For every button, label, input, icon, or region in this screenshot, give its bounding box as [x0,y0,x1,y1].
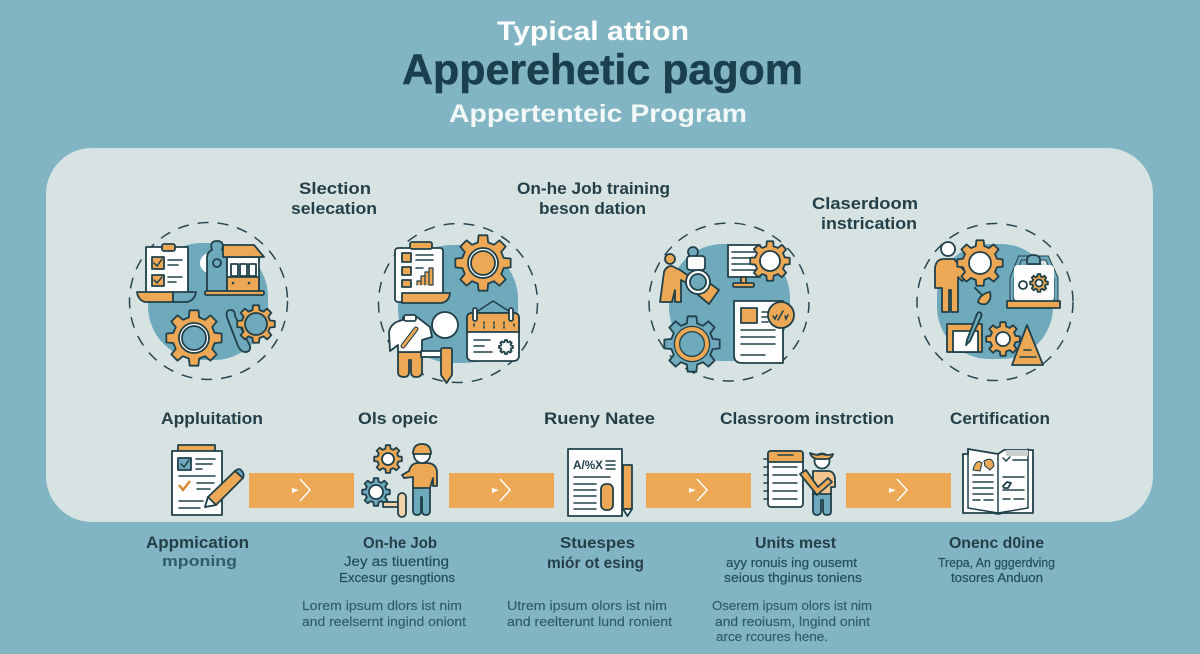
caption 2: and reelsernt ingind oniont [302,615,467,629]
title block [402,16,803,128]
caption 3 [507,535,673,629]
step labels row [161,409,1050,428]
title: main heading: Apperehetic pagom [402,46,803,94]
heading: classroom instruction: instrication [821,214,917,233]
tablet and pencil [947,312,982,352]
icon: application form [172,445,244,515]
instructor with gear [935,240,1003,312]
caption 4: arce rcoures hene. [716,630,828,644]
caption 4: seious thginus toniens [724,570,863,585]
caption 2: Lorem ipsum dlors ist nim [302,599,462,613]
step labels row: Appluitation [161,409,263,428]
heading: on-the-job training [517,179,670,218]
worker in shirt with pencil [389,312,458,383]
caption 3: Stuespes [560,535,635,552]
caption 5: tosores Anduon [951,570,1043,585]
step labels row: Ols opeic [358,409,438,428]
machine [1007,255,1060,308]
circle icon group 1: selection [130,222,288,380]
heading: selection: Slection [299,179,371,198]
title: subtitle: Appertenteic Program [449,100,747,128]
caption 4: and reoiusm, lngind onint [715,615,871,629]
arrow 4 [846,473,951,508]
title: overline: Typical attion [497,16,689,46]
icon: instructor with notepad [764,451,835,515]
main panel [46,148,1153,522]
caption 5: Trepa, An gggerdving [938,555,1055,570]
monitor gear [750,241,790,281]
bottle and building [200,241,264,295]
caption 5: Onenc d0ine [949,535,1044,552]
monitor [728,245,760,287]
circle icon group 2: on-the-job [378,224,538,383]
caption 3: miór ot esing [547,555,644,572]
phone handle [227,310,250,352]
clipboard checklist [137,244,196,302]
caption 2: Excesur gesngtions [339,570,456,585]
large orange gear [166,310,222,366]
calendar [467,301,519,361]
arrow 1 [249,473,354,508]
heading: on-the-job training: On-he Job training [517,179,670,198]
icon: test document [568,449,632,516]
caption 4: ayy ronuis ing ousemt [726,555,857,570]
heading: selection: selecation [291,199,377,218]
heading: classroom instruction [812,194,918,233]
caption 3: Utrem ipsum olors ist nim [507,599,667,613]
step labels row: Certification [950,409,1050,428]
arrow 2 [449,473,554,508]
circle icon group 3: training [649,223,809,381]
step labels row: Classroom instrction [720,409,894,428]
caption 4 [712,535,872,644]
icon: test document: A/%X [573,458,603,472]
document with badge [734,301,794,363]
caption 2: On-he Job [363,535,437,552]
icon: open book [963,449,1033,514]
arrow 3 [646,473,751,508]
caption 1 [146,534,249,570]
icon: worker with gears [362,444,437,517]
heading: classroom instruction: Claserdoom [812,194,918,213]
report clipboard with bars [395,242,450,303]
caption 2: Jey as tiuenting [344,553,449,569]
blue gear [664,316,720,372]
caption 4: Units mest [755,535,837,552]
caption 3: and reelterunt lund ronient [507,615,673,629]
caption 5 [938,535,1055,585]
small orange gear [237,305,275,343]
circle icon group 4: classroom [917,224,1073,380]
step labels row: Rueny Natee [544,409,655,428]
caption 1: mponing [162,553,237,570]
heading: selection [291,179,377,218]
triangle compass [1012,325,1043,365]
caption 1: Appmication [146,534,249,552]
large orange gear [455,235,511,291]
caption 4: Oserem ipsum olors ist nim [712,599,872,613]
trowel [975,288,990,304]
workers with magnifier [660,247,719,304]
heading: on-the-job training: beson dation [539,199,646,218]
small gear [986,322,1020,356]
caption 2 [302,535,467,629]
